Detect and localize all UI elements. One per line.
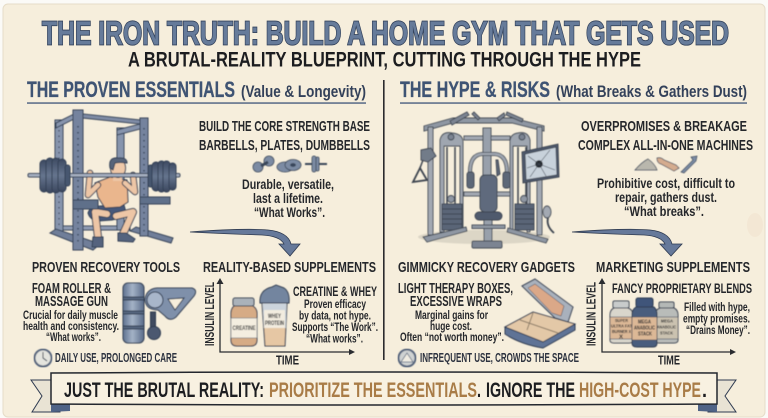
icon: creatine jar [231, 298, 257, 346]
lifter [73, 158, 135, 247]
chart axes [584, 278, 736, 368]
arrow: machine to supplements [572, 229, 682, 256]
text: creatine and whey: by data, not hype. [299, 308, 371, 322]
icon: whey shaker [260, 285, 289, 346]
icon: supplement bottles: X [619, 334, 624, 340]
illustration: all-in-one machine [413, 112, 559, 248]
banner text: IGNORE THE [486, 379, 575, 402]
banner: brutal reality [31, 372, 736, 412]
icon: creatine jar: CREATINE [232, 326, 256, 332]
banner text: . [702, 379, 707, 402]
text: creatine and whey: CREATINE & WHEY [293, 284, 377, 299]
icon: supplement bottles: ANABOLIC [634, 326, 655, 332]
block: proven recovery tools: health and consistency. [23, 319, 119, 333]
icon: supplement bottles: BURNER X [612, 329, 632, 335]
text: core strength base: BARBELLS, PLATES, DUMBBELLS [199, 137, 370, 154]
banner box [51, 372, 717, 405]
text: infrequent use: INFREQUENT USE, CROWDS THE SPACE [420, 351, 579, 365]
text: daily use: DAILY USE, PROLONGED CARE [55, 351, 177, 365]
block: proven recovery tools: PROVEN RECOVERY TOOLS [32, 259, 180, 276]
text: durable versatile [242, 177, 334, 220]
icon: supplement bottles [610, 298, 678, 347]
ribbon tail left [31, 380, 70, 412]
block: gimmicky recovery gadgets: Marginal gains for [415, 308, 488, 322]
text: creatine and whey: Proven efficacy [304, 297, 366, 311]
block: proven recovery tools: FOAM ROLLER & [32, 281, 111, 297]
heading: hype and risks [400, 77, 747, 104]
text: durable versatile: “What Works”. [254, 205, 325, 220]
text: prohibitive cost [597, 176, 735, 219]
block: proven recovery tools: “What works”. [46, 330, 101, 344]
ribbon tail right [698, 380, 736, 412]
banner text: . [477, 379, 481, 402]
chart axes: INSULIN LEVEL [203, 282, 217, 346]
icon: supplement bottles: MEGA [661, 318, 673, 324]
banner text: HIGH-COST HYPE [579, 379, 701, 402]
block: gimmicky recovery gadgets: huge cost. [430, 319, 472, 333]
text: creatine and whey [292, 284, 378, 346]
text: filled with hype [683, 300, 750, 337]
icon: whey shaker: WHEY [268, 314, 281, 320]
block: proven recovery tools: Crucial for daily muscle [23, 308, 118, 322]
heading: proven essentials: (Value & Longevity) [241, 82, 366, 101]
subtitle: A BRUTAL-REALITY BLUEPRINT, CUTTING THROUGH THE HYPE [128, 48, 641, 72]
heading: hype and risks: THE HYPE & RISKS [400, 77, 550, 102]
icon: supplement bottles: SUPER [615, 318, 628, 324]
icons: dumbbell, plates, barbell [253, 156, 327, 172]
heading: proven essentials: THE PROVEN ESSENTIALS [27, 77, 235, 102]
text: prohibitive cost: “What breaks”. [624, 204, 704, 219]
block: marketing supplements chart [584, 259, 752, 368]
block: gimmicky recovery gadgets: EXCESSIVE WRAPS [410, 294, 502, 310]
text: overpromises [578, 118, 753, 154]
text: core strength base [199, 118, 370, 154]
block: gimmicky recovery gadgets: GIMMICKY RECOVERY GADGETS [398, 259, 575, 276]
banner text [64, 379, 707, 402]
block: proven recovery tools: MASSAGE GUN [35, 294, 108, 310]
icon: supplement bottles: ANABOLIC [657, 324, 676, 330]
block: reality-based supplements chart: REALITY-BASED SUPPLEMENTS [203, 259, 376, 276]
chart axes: INSULIN LEVEL [584, 282, 598, 346]
icon: whey shaker: PROTEIN [265, 321, 284, 327]
text: creatine and whey: Supports “The Work”. [292, 320, 378, 334]
block: reality-based supplements chart [203, 259, 378, 368]
icon: dust badge [398, 350, 416, 366]
chart axes: TIME [276, 354, 299, 368]
icon: supplement bottles: ULTRA FAT [611, 324, 632, 330]
text: creatine and whey: “What works”. [306, 332, 363, 346]
block: gimmicky recovery gadgets [398, 259, 575, 344]
text: prohibitive cost: Prohibitive cost, difficult to [597, 176, 735, 191]
text: durable versatile: last a lifetime. [253, 191, 323, 206]
icon: supplement bottles: MEGA [638, 320, 651, 326]
arrow: rack to supplements [190, 229, 300, 256]
banner text: JUST THE BRUTAL REALITY: [64, 379, 264, 402]
icon: supplement bottles: STACK [660, 330, 673, 336]
icon: light therapy box and wraps [505, 279, 575, 348]
text: core strength base: BUILD THE CORE STRENGTH BASE [199, 118, 370, 135]
chart axes: TIME [658, 354, 680, 368]
icon: clock [34, 350, 52, 366]
block: gimmicky recovery gadgets: Often “not worth money”. [400, 330, 504, 344]
icon: foam roller and massage gun [123, 283, 196, 343]
block: proven recovery tools [23, 259, 180, 344]
banner text: PRIORITIZE THE ESSENTIALS [269, 379, 477, 402]
text: prohibitive cost: repair, gathers dust. [615, 190, 717, 205]
panel: hype and risks [398, 77, 753, 368]
text: durable versatile: Durable, versatile, [242, 177, 334, 192]
illustration: squat rack with lifter [28, 110, 180, 250]
block: gimmicky recovery gadgets: LIGHT THERAPY BOXES, [398, 281, 513, 297]
center divider [383, 80, 385, 360]
panel: proven essentials [23, 77, 378, 368]
icon: supplement bottles: STACK [638, 332, 652, 338]
icons: dust pile and wrenches [635, 156, 697, 173]
broken screen [522, 144, 559, 183]
chart axes [203, 278, 355, 368]
